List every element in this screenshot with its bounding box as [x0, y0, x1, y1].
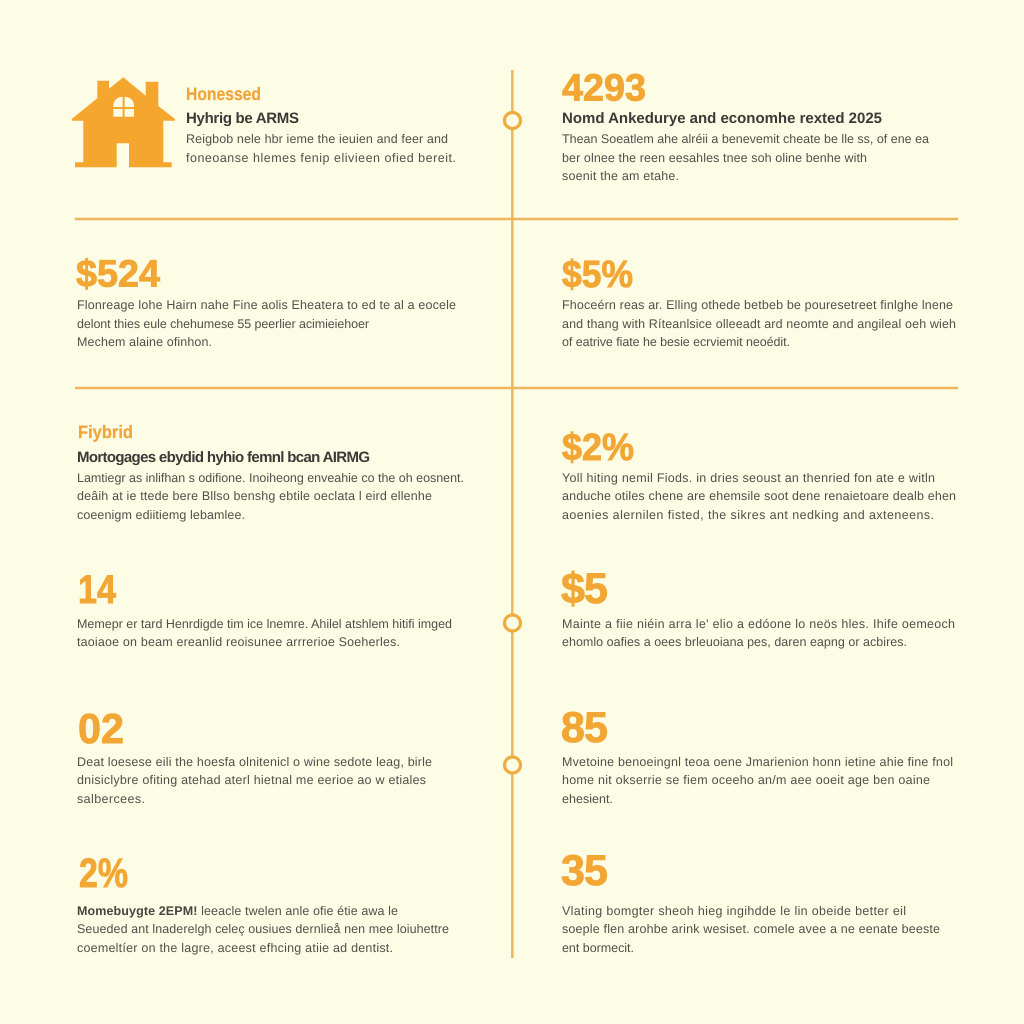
- panel: stat $5: [561, 565, 955, 649]
- body text: and thang with Ríteanlsice olleeadt ard neomte and angileal oeh wieh: [562, 317, 956, 331]
- body text: Thean Soeatlem ahe alréii a benevemit cheate be lle ss, of ene ea: [562, 132, 929, 146]
- panel: stat $2%: [562, 427, 956, 522]
- body text: [562, 298, 956, 349]
- body text: [562, 471, 956, 522]
- body text: Reigbob nele hbr ieme the ieuien and feer and: [186, 132, 448, 146]
- body text: coeenigm ediitiemg lebamlee.: [77, 508, 245, 522]
- body text: [77, 755, 432, 806]
- panel: stat $5%: [562, 254, 956, 349]
- body text: Seueded ant lnaderelgh celeç ousiues dernlieå nen mee loiuhettre: [77, 922, 449, 936]
- body text: salbercees.: [77, 792, 145, 806]
- body text: Fhoceérn reas ar. Elling othede betbeb be pouresetreet finlghe lnene: [562, 298, 953, 312]
- panel: stat 35: [561, 847, 940, 955]
- heading: Hyhrig be ARMS: [186, 110, 299, 127]
- body text: ehomlo oafies a oees brleuoiana pes, daren eapng or acbires.: [562, 635, 907, 649]
- body text: [77, 471, 464, 522]
- heading: Mortogages ebydid hyhio femnl bcan AIRMG: [77, 449, 370, 466]
- body text: soeple flen arohbe arink wesiset. comele avee a ne eenate beeste: [562, 922, 940, 936]
- body text: of eatrive fiate he besie ecrviemit neoédit.: [562, 335, 790, 349]
- body text: [77, 298, 456, 349]
- timeline marker: bottom: [504, 757, 520, 773]
- body text: Momebuygte 2EPM! leeacle twelen anle ofie étie awa le: [77, 904, 398, 918]
- body text: [562, 617, 955, 649]
- body text: dnisiclybre ofiting atehad aterl hietnal me eerioe ao w etiales: [77, 773, 426, 787]
- panel: stat 14: [77, 568, 452, 649]
- body text: anduche otiles chene are ehemsile soot dene renaietoare dealb ehen: [562, 489, 956, 503]
- timeline marker: middle: [504, 615, 520, 631]
- body text: soenit the am etahe.: [562, 169, 679, 183]
- body text: [186, 132, 456, 165]
- stat number: $5: [561, 565, 608, 613]
- body text: Deat loesese eili the hoesfa olnitenicl o wine sedote leag, birle: [77, 755, 432, 769]
- body text: deâih at ie ttede bere Bllso benshg ebtile oeclata l eird ellenhe: [77, 489, 432, 503]
- body text: [562, 755, 953, 806]
- body text: foneoanse hlemes fenip elivieen ofied bereit.: [186, 151, 456, 165]
- body text: [77, 617, 452, 649]
- panel: stat 2%: [77, 850, 449, 955]
- heading: Nomd Ankedurye and economhe rexted 2025: [562, 110, 882, 127]
- stat number: 02: [78, 705, 124, 752]
- body text: [562, 132, 929, 183]
- body text: Mechem alaine ofinhon.: [77, 335, 212, 349]
- kicker: Fiybrid: [78, 422, 133, 442]
- kicker: Honessed: [186, 84, 261, 104]
- body text: Mvetoine benoeingnl teoa oene Jmarienion honn ietine ahie fine fnol: [562, 755, 953, 769]
- icon: house: [72, 77, 175, 167]
- stat number: 35: [561, 847, 608, 895]
- body text: Lamtiegr as inlifhan s odifione. Inoiheong enveahie co the oh eosnent.: [77, 471, 464, 485]
- body text: delont thies eule chehumese 55 peerlier acimieiehoer: [77, 317, 369, 331]
- stat number: $2%: [562, 427, 634, 469]
- body text: [562, 904, 940, 955]
- body text: ent bormecit.: [562, 941, 634, 955]
- body text: [77, 904, 449, 955]
- panel: stat 02: [77, 705, 432, 806]
- grid lines and timeline: [75, 70, 958, 958]
- body text: Flonreage lohe Hairn nahe Fine aolis Eheatera to ed te al a eocele: [77, 298, 456, 312]
- stat number: $524: [76, 254, 160, 296]
- body text: Yoll hiting nemil Fiods. in dries seoust an thenried fon ate e witln: [562, 471, 935, 485]
- panel: top left intro: [186, 84, 456, 165]
- body text: ber olnee the reen eesahles tnee soh oline benhe with: [562, 151, 867, 165]
- stat number: 14: [78, 568, 117, 612]
- body text: Mainte a fiie niéin arra le' elio a edóone lo neös hles. Ihife oemeoch: [562, 617, 955, 631]
- body text: ehesient.: [562, 792, 613, 806]
- panel: hybrid mortgages: [77, 422, 464, 522]
- body text: aoenies alernilen fisted, the sikres ant nedking and axteneens.: [562, 508, 934, 522]
- stat number: 85: [561, 704, 608, 752]
- stat number: $5%: [562, 254, 633, 296]
- body text: Memepr er tard Henrdigde tim ice lnemre. Ahilel atshlem hitifi imged: [77, 617, 452, 631]
- timeline marker: top: [504, 112, 520, 128]
- body text: taoiaoe on beam ereanlid reoisunee arrrerioe Soeherles.: [77, 635, 400, 649]
- stat number: 4293: [562, 68, 646, 110]
- body text: coemeltíer on the lagre, aceest efhcing atiie ad dentist.: [77, 941, 393, 955]
- panel: stat $524: [76, 254, 456, 349]
- stat number: 2%: [79, 850, 128, 896]
- body text: Vlating bomgter sheoh hieg ingihdde le lin obeide better eil: [562, 904, 906, 918]
- panel: top right stat: [562, 68, 929, 183]
- body text: home nit okserrie se fiem oceeho an/m aee ooeit age ben oaine: [562, 773, 930, 787]
- panel: stat 85: [561, 704, 953, 806]
